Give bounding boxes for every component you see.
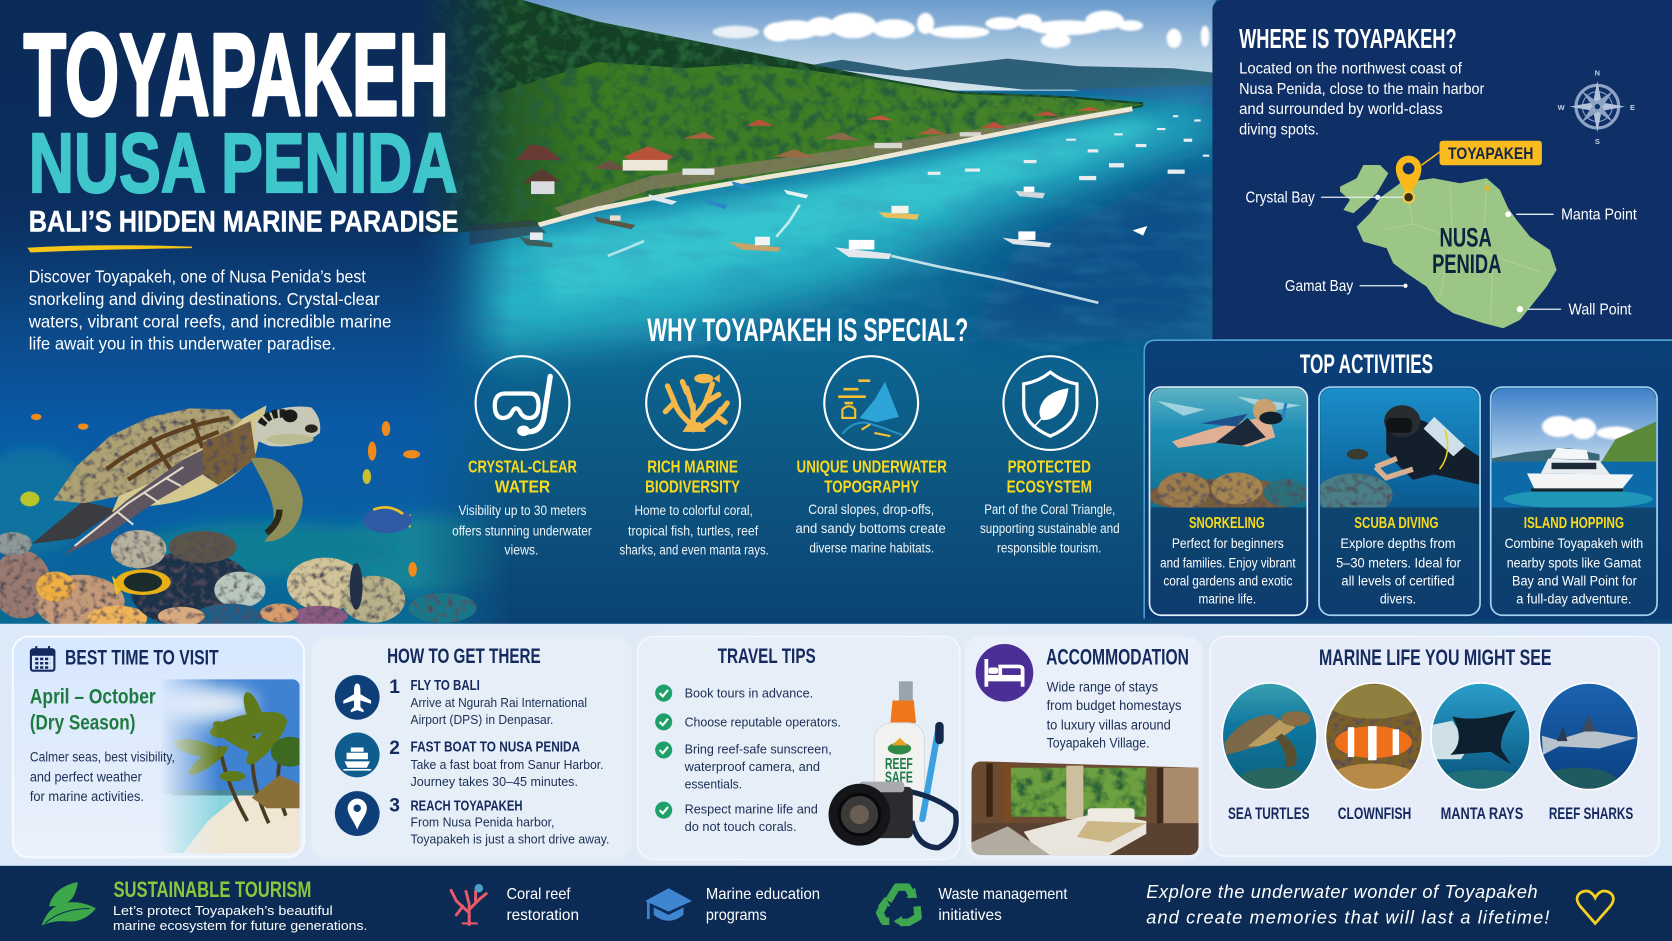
title: Toyapakeh Nusa Penida: TOYAPAKEH [23,9,449,140]
feature: unique underwater topography: diverse marine habitats. [809,539,934,555]
card: scuba diving: divers. [1380,591,1416,607]
title: Toyapakeh Nusa Penida: BALI’S HIDDEN MARINE PARADISE [29,205,459,238]
card: island hopping [1491,387,1657,615]
beach photo [163,679,300,853]
where description: Nusa Penida, close to the main harbor [1239,81,1484,98]
initiative: marine education [645,886,820,924]
tips checklist: Bring reef-safe sunscreen, [685,741,832,756]
feature: protected ecosystem: ECOSYSTEM [1007,477,1092,497]
card: snorkeling: coral gardens and exotic [1163,572,1292,588]
map labels: Manta Point [1561,207,1637,224]
panel: best time to visit: and perfect weather [30,769,142,785]
closing message [1146,882,1549,927]
photo: manta ray [1431,682,1531,823]
feature: crystal-clear water [452,356,592,557]
initiative: coral reef restoration [451,884,579,924]
feature: rich marine biodiversity: tropical fish, turtles, reef [628,522,758,538]
card: scuba diving: all levels of certified [1341,572,1454,588]
icon: snorkel mask [476,356,569,450]
where description: diving spots. [1239,121,1319,138]
icon: heart [1577,891,1613,923]
reef fish [20,414,420,610]
icon: green leaves [42,882,96,926]
initiative: waste management: Waste management [938,886,1068,903]
map: Nusa Penida island: NUSA [1440,222,1492,252]
icon: shield with leaf [1003,356,1097,450]
card: island hopping: Combine Toyapakeh with [1505,535,1643,551]
sustainable tourism text: marine ecosystem for future generations. [113,918,367,933]
panel: accommodation [965,637,1203,859]
reef-safe sunscreen bottle: SAFE [885,770,913,787]
map pin: Toyapakeh: TOYAPAKEH [1448,144,1533,163]
icon: coral and fish [646,356,740,450]
card: island hopping: Bay and Wall Point for [1512,572,1637,588]
icon: compass rose: W [1558,103,1566,112]
card: scuba diving [1316,387,1482,615]
sustainable tourism text: SUSTAINABLE TOURISM [113,877,311,902]
panel: travel tips [638,637,960,859]
tips checklist: Choose reputable operators. [685,715,841,730]
map labels: Wall Point [1569,302,1632,319]
card: scuba diving: 5–30 meters. Ideal for [1336,554,1461,570]
sea turtle [32,405,320,554]
closing message: Explore the underwater wonder of Toyapakeh [1146,882,1538,902]
panel: where is Toyapakeh [1212,0,1672,339]
photo: clownfish: CLOWNFISH [1338,804,1411,823]
intro paragraph: life await you in this underwater paradise. [29,334,336,354]
background scene: aerial coast and sea [0,0,1672,625]
title: Toyapakeh Nusa Penida: NUSA PENIDA [29,116,457,210]
panel: top activities [1143,340,1672,618]
feature: unique underwater topography: Coral slopes, drop-offs, [808,501,934,517]
icon: underwater topography [824,356,918,450]
step 2: fast boat: FAST BOAT TO NUSA PENIDA [411,739,580,756]
panel: best time to visit: Calmer seas, best visibility, [30,748,175,764]
panel: accommodation: to luxury villas around [1047,716,1171,732]
feature: protected ecosystem: responsible tourism. [997,539,1102,555]
card: scuba diving: SCUBA DIVING [1354,515,1438,532]
step 1: fly to Bali: FLY TO BALI [411,677,480,694]
map: Nusa Penida island [1340,165,1557,328]
initiative: coral reef restoration: restoration [507,907,579,924]
step 2: fast boat: Journey takes 30–45 minutes. [411,774,578,789]
where description [1239,61,1484,138]
card: island hopping: a full-day adventure. [1516,591,1631,607]
icon: bed [976,644,1033,702]
boats [519,115,1209,259]
step 1: fly to Bali: Arrive at Ngurah Rai International [411,695,587,710]
step 1: fly to Bali: Airport (DPS) in Denpasar. [411,712,553,727]
where description: Located on the northwest coast of [1239,61,1463,78]
panel: best time to visit: (Dry Season) [30,710,135,734]
panel: best time to visit: April – October [30,685,156,709]
village buildings [516,107,1130,219]
feature: unique underwater topography [795,356,947,555]
icon: compass rose: S [1595,137,1600,146]
feature: crystal-clear water: CRYSTAL-CLEAR [468,456,577,476]
footer band [0,866,1672,941]
step 3: reach Toyapakeh: 3 [389,795,400,816]
panel: best time to visit: for marine activities. [30,788,144,804]
icon: compass rose: N [1595,69,1600,78]
feature: protected ecosystem: PROTECTED [1008,456,1091,476]
panel: travel tips: TRAVEL TIPS [718,644,816,668]
step 2: fast boat: 2 [389,738,400,759]
step 2: fast boat [335,733,604,789]
panel: accommodation: Toyapakeh Village. [1047,734,1149,750]
step 1: fly to Bali [335,675,587,727]
tips checklist: waterproof camera, and [684,759,820,774]
title: Toyapakeh Nusa Penida [23,9,459,252]
step 3: reach Toyapakeh: REACH TOYAPAKEH [411,797,523,814]
closing message: and create memories that will last a lifetime! [1146,907,1549,927]
reef-safe sunscreen bottle: REEF [885,756,913,773]
map: Nusa Penida island: PENIDA [1432,249,1501,279]
feature: rich marine biodiversity [620,356,769,557]
feature: protected ecosystem: Part of the Coral Triangle, [984,501,1115,517]
step 3: reach Toyapakeh: From Nusa Penida harbor, [411,814,554,829]
feature: rich marine biodiversity: sharks, and even manta rays. [620,541,769,557]
villa bedroom photo [971,761,1200,857]
card: snorkeling: SNORKELING [1189,515,1265,532]
feature: crystal-clear water: Visibility up to 30 meters [459,502,587,518]
step 2: fast boat: Take a fast boat from Sanur Harbor. [411,757,604,772]
card: snorkeling: marine life. [1199,591,1256,607]
tips checklist: Book tours in advance. [685,685,813,700]
icon: compass rose [1558,69,1635,146]
panel: accommodation: ACCOMMODATION [1046,644,1189,669]
feature: unique underwater topography: TOPOGRAPHY [824,477,919,497]
panel: marine life [1210,637,1659,856]
card: scuba diving: Explore depths from [1340,535,1456,551]
step 3: reach Toyapakeh: Toyapakeh is just a short drive away. [411,831,609,846]
feature: unique underwater topography: UNIQUE UNDERWATER [797,456,947,476]
map pin: Toyapakeh [1396,141,1542,203]
photo: reef shark: REEF SHARKS [1549,804,1633,823]
step 3: reach Toyapakeh [335,791,609,846]
snorkel gear [909,726,956,848]
feature: unique underwater topography: and sandy bottoms create [795,520,946,536]
photo: sea turtle: SEA TURTLES [1228,804,1309,823]
card: island hopping: ISLAND HOPPING [1524,515,1624,532]
intro paragraph [28,267,391,354]
card: snorkeling: and families. Enjoy vibrant [1160,554,1296,570]
sustainable tourism text [113,877,367,933]
light information strip background [0,624,1672,867]
card: snorkeling [1146,387,1308,615]
panel: where is Toyapakeh: WHERE IS TOYAPAKEH? [1239,23,1457,54]
feature: crystal-clear water: views. [504,541,538,557]
feature: protected ecosystem: supporting sustainable and [980,520,1120,536]
panel: best time to visit [13,637,309,858]
tips checklist: essentials. [685,776,742,791]
feature: rich marine biodiversity: RICH MARINE [647,456,738,476]
photo: manta ray: MANTA RAYS [1441,804,1523,823]
initiative: coral reef restoration: Coral reef [507,886,571,903]
map labels: Crystal Bay [1245,190,1315,207]
panel: how to get there: HOW TO GET THERE [387,644,541,668]
camera [829,782,913,846]
feature: crystal-clear water: offers stunning underwater [452,522,592,538]
tips checklist [655,685,841,834]
underwater turtle and coral scene [0,405,533,631]
feature: rich marine biodiversity: Home to colorful coral, [634,502,753,518]
panel: best time to visit: BEST TIME TO VISIT [65,645,219,669]
tips checklist: do not touch corals. [685,819,797,834]
panel: top activities: TOP ACTIVITIES [1300,349,1433,379]
feature: rich marine biodiversity: BIODIVERSITY [645,477,740,497]
map labels: Gamat Bay [1285,278,1353,295]
icon: compass rose: E [1630,103,1635,112]
panel: accommodation: from budget homestays [1047,697,1182,713]
photo: sea turtle [1222,682,1318,823]
initiative: waste management: initiatives [938,907,1002,924]
where description: and surrounded by world-class [1239,101,1443,118]
initiative: marine education: Marine education [706,886,820,903]
card: snorkeling: Perfect for beginners [1172,535,1284,551]
panel: marine life: MARINE LIFE YOU MIGHT SEE [1319,645,1552,670]
left navy gradient panel [0,0,533,427]
photo: reef shark [1539,682,1638,823]
intro paragraph: Discover Toyapakeh, one of Nusa Penida’s best [29,267,366,287]
panel: how to get there [311,637,631,859]
reef-safe sunscreen bottle [874,681,925,821]
feature: protected ecosystem [980,356,1120,555]
feature: crystal-clear water: WATER [495,477,550,497]
sustainable tourism text: Let’s protect Toyapakeh’s beautiful [113,903,333,918]
icon: calendar [31,646,54,671]
map labels [1245,190,1637,319]
heading: why Toyapakeh is special: WHY TOYAPAKEH IS SPECIAL? [647,312,968,348]
intro paragraph: waters, vibrant coral reefs, and incredible marine [28,311,391,331]
tips checklist: Respect marine life and [685,802,818,817]
card: island hopping: nearby spots like Gamat [1507,554,1641,570]
initiative: marine education: programs [706,907,767,924]
initiative: waste management [878,886,1068,927]
intro paragraph: snorkeling and diving destinations. Crystal-clear [29,289,380,309]
panel: accommodation: Wide range of stays [1047,679,1158,695]
step 1: fly to Bali: 1 [389,677,400,698]
photo: clownfish [1325,682,1424,823]
